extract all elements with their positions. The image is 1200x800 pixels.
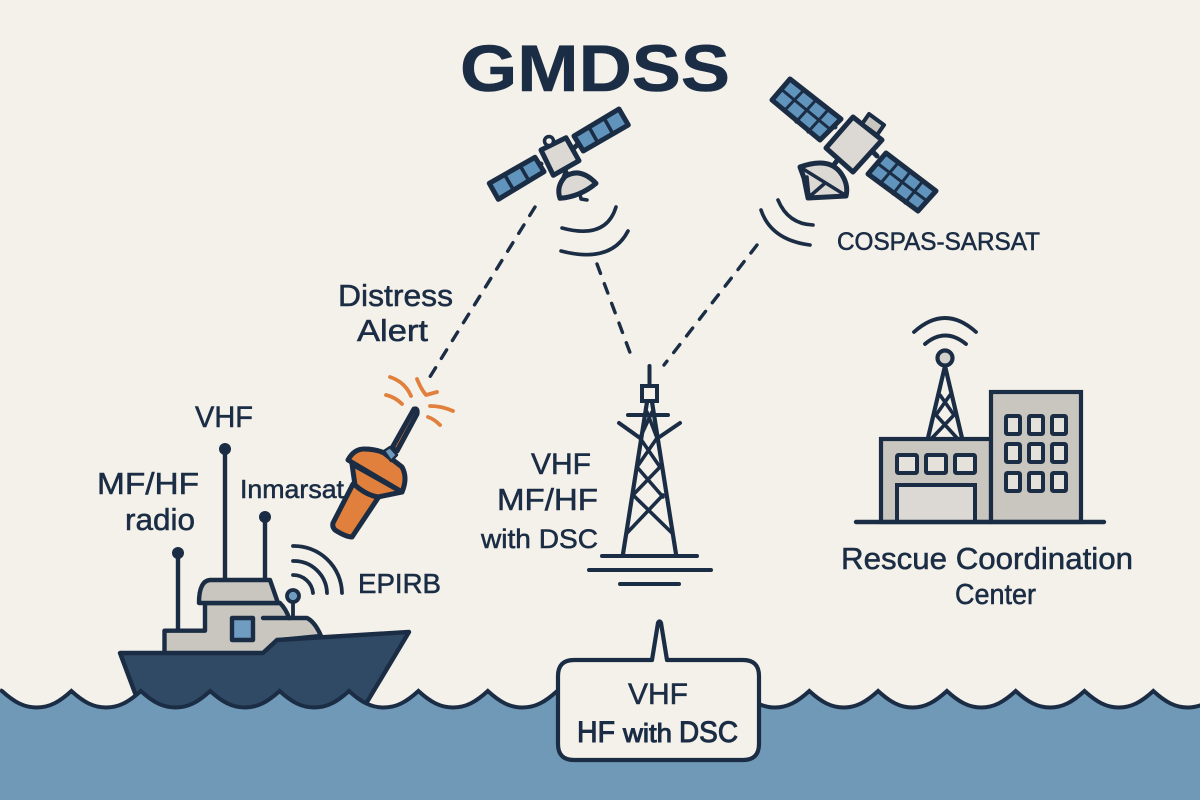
tall building (991, 392, 1081, 522)
ship hull (120, 632, 409, 720)
label: Distress Alert (338, 278, 453, 348)
icon: Rescue Coordination Center building (856, 318, 1104, 522)
label: MF/HF radio (97, 466, 199, 537)
ship signal mast (287, 590, 299, 618)
signal arcs: communications satellite (561, 207, 628, 255)
label: VHF MF/HF with DSC (tower): MF/HF (497, 482, 598, 517)
label: MF/HF radio: radio (125, 502, 195, 537)
icon: communications satellite (489, 109, 628, 200)
callout: VHF HF with DSC: DSC (679, 716, 738, 749)
icon: COSPAS-SARSAT satellite (772, 79, 936, 211)
building antenna (914, 318, 976, 438)
label: VHF MF/HF with DSC (tower): with DSC (480, 524, 598, 554)
label: Rescue Coordination Center (841, 541, 1133, 611)
label: VHF MF/HF with DSC (tower): VHF (531, 448, 591, 481)
icon: ship (120, 443, 409, 720)
title: GMDSS (460, 31, 730, 105)
label: COSPAS-SARSAT: COSPAS-SARSAT (837, 228, 1040, 256)
low building windows (897, 455, 975, 473)
ship window (232, 618, 253, 640)
callout: VHF HF with DSC: VHF (628, 678, 688, 711)
callout: VHF HF with DSC: with (622, 718, 672, 748)
sea with scalloped waves (0, 690, 1200, 800)
signal arcs: COSPAS-SARSAT satellite (761, 200, 813, 245)
callout: VHF HF with DSC: HF (577, 716, 615, 749)
ship antennas (172, 443, 271, 632)
ship cabin (164, 603, 321, 654)
ship signal arcs (293, 546, 342, 593)
label: Inmarsat: Inmarsat (240, 474, 345, 504)
tall building windows (1006, 416, 1066, 491)
garage door (897, 485, 975, 522)
label: EPIRB: EPIRB (358, 568, 441, 599)
label: MF/HF radio: MF/HF (97, 466, 199, 501)
dashed signal lines (428, 207, 757, 380)
label: Distress Alert: Alert (357, 313, 428, 348)
icon: EPIRB beacon (333, 377, 453, 537)
label: VHF MF/HF with DSC (tower) (480, 448, 598, 554)
icon: coastal radio tower (589, 366, 711, 584)
label: VHF antenna: VHF (195, 401, 253, 434)
label: Rescue Coordination Center: Rescue Coordination (841, 541, 1133, 576)
low building (881, 439, 991, 522)
label: Distress Alert: Distress (338, 278, 453, 313)
callout: VHF HF with DSC (558, 622, 759, 760)
label: Rescue Coordination Center: Center (955, 579, 1036, 611)
